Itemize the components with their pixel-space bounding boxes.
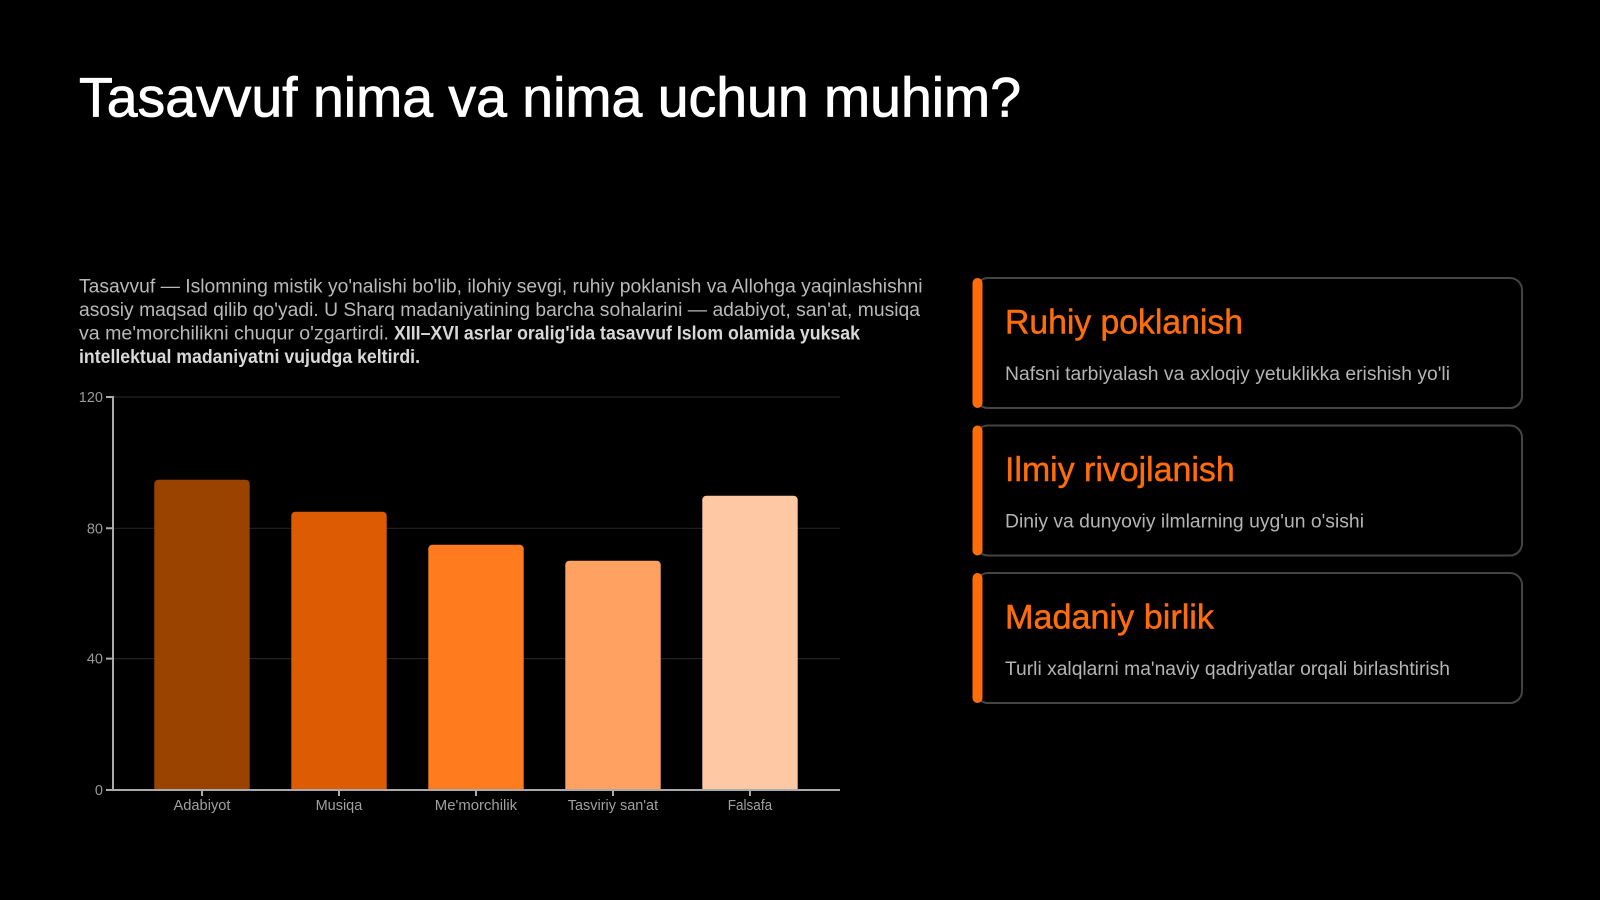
card description: Turli xalqlarni ma'naviy qadriyatlar orqali birlashtirish <box>1005 659 1450 680</box>
x axis labels: Falsafa <box>728 798 773 814</box>
panel: Ruhiy poklanish <box>972 278 1522 408</box>
text block: intro paragraph <box>79 277 922 368</box>
text block: intro paragraph: Tasavvuf — Islomning mistik yo'nalishi bo'lib, ilohiy sevgi, ruhiy poklanish va Allohga yaqinlashishni <box>79 277 922 298</box>
x axis labels: Tasviriy san'at <box>568 798 658 814</box>
card heading: Madaniy birlik <box>1005 598 1215 636</box>
accent bar <box>972 278 982 408</box>
bar: Tasviriy san'at <box>565 561 661 790</box>
x axis labels: Me'morchilik <box>435 798 518 814</box>
y axis labels: 40 <box>87 652 103 668</box>
x axis labels: Musiqa <box>316 798 363 814</box>
text block: intro paragraph: intellektual madaniyatni vujudga keltirdi. <box>79 347 420 368</box>
text block: intro paragraph: asosiy maqsad qilib qo'yadi. U Sharq madaniyatining barcha sohalarini — adabiyot, san'at, musiqa <box>79 300 920 321</box>
y axis labels: 0 <box>95 783 103 799</box>
bar: Me'morchilik <box>428 545 524 790</box>
bar: Adabiyot <box>154 480 250 790</box>
bar: Falsafa <box>702 496 798 790</box>
accent bar <box>972 426 982 556</box>
panel: Ilmiy rivojlanish <box>972 426 1522 556</box>
y axis labels: 120 <box>79 390 103 406</box>
chart axes <box>106 397 840 796</box>
x axis labels <box>174 798 773 814</box>
title: Tasavvuf nima va nima uchun muhim? <box>79 66 1021 128</box>
card heading: Ilmiy rivojlanish <box>1005 451 1235 489</box>
bar: Musiqa <box>291 512 387 790</box>
text block: intro paragraph: XIII–XVI asrlar oralig'ida tasavvuf Islom olamida yuksak <box>394 324 860 344</box>
bar chart <box>79 390 840 814</box>
card description: Nafsni tarbiyalash va axloqiy yetuklikka erishish yo'li <box>1005 364 1450 385</box>
accent bar <box>972 573 982 703</box>
card heading: Ruhiy poklanish <box>1005 304 1243 342</box>
x axis labels: Adabiyot <box>174 798 230 814</box>
panel: Madaniy birlik <box>972 573 1522 703</box>
card description: Diniy va dunyoviy ilmlarning uyg'un o'sishi <box>1005 512 1364 532</box>
y axis labels <box>79 390 103 799</box>
y axis labels: 80 <box>87 522 103 538</box>
text block: intro paragraph: va me'morchilikni chuqur o'zgartirdi. <box>79 324 389 344</box>
